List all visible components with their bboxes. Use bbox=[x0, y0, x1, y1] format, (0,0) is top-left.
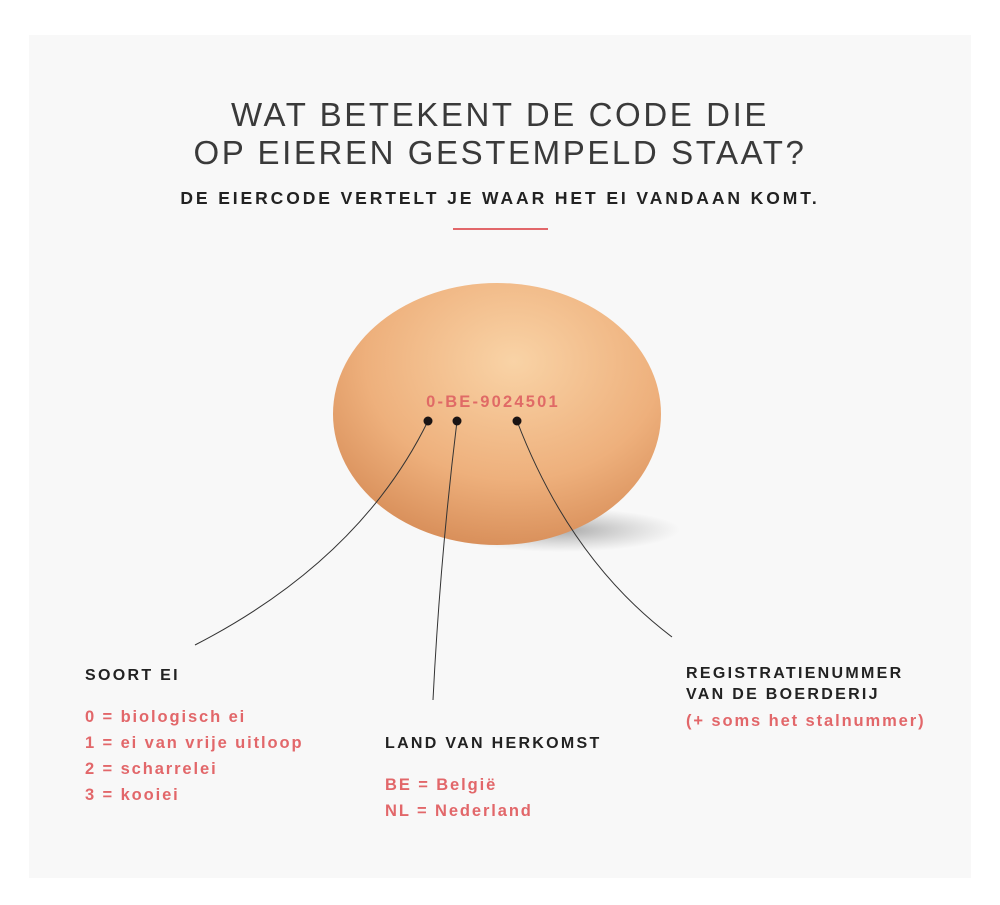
egg shadow bbox=[440, 508, 680, 552]
panel: registratienummer: (+ soms het stalnummer) bbox=[686, 712, 925, 730]
panel: registratienummer bbox=[686, 665, 925, 730]
panel: land van herkomst: LAND VAN HERKOMST bbox=[385, 735, 602, 752]
panel: soort ei: 0 = biologisch ei bbox=[85, 708, 246, 726]
title bbox=[193, 96, 806, 171]
egg code: 0-BE-9024501 bbox=[426, 393, 560, 411]
panel: land van herkomst: NL = Nederland bbox=[385, 802, 533, 820]
egg bbox=[333, 283, 661, 545]
panel: registratienummer: REGISTRATIENUMMER bbox=[686, 665, 903, 682]
panel: land van herkomst: BE = België bbox=[385, 776, 497, 794]
title: OP EIEREN GESTEMPELD STAAT? bbox=[193, 134, 806, 171]
dots bbox=[424, 416, 522, 426]
panel: soort ei: 2 = scharrelei bbox=[85, 760, 218, 778]
divider accent bbox=[453, 228, 548, 230]
panel: soort ei: 1 = ei van vrije uitloop bbox=[85, 734, 303, 752]
connector lines bbox=[195, 421, 672, 700]
panel: registratienummer: VAN DE BOERDERIJ bbox=[686, 686, 880, 703]
subtitle: DE EIERCODE VERTELT JE WAAR HET EI VANDAAN KOMT. bbox=[180, 188, 820, 208]
panel: soort ei: 3 = kooiei bbox=[85, 786, 180, 804]
title: WAT BETEKENT DE CODE DIE bbox=[231, 96, 769, 133]
panel: soort ei bbox=[85, 667, 303, 804]
panel: soort ei: SOORT EI bbox=[85, 667, 180, 684]
panel: land van herkomst bbox=[385, 735, 602, 820]
